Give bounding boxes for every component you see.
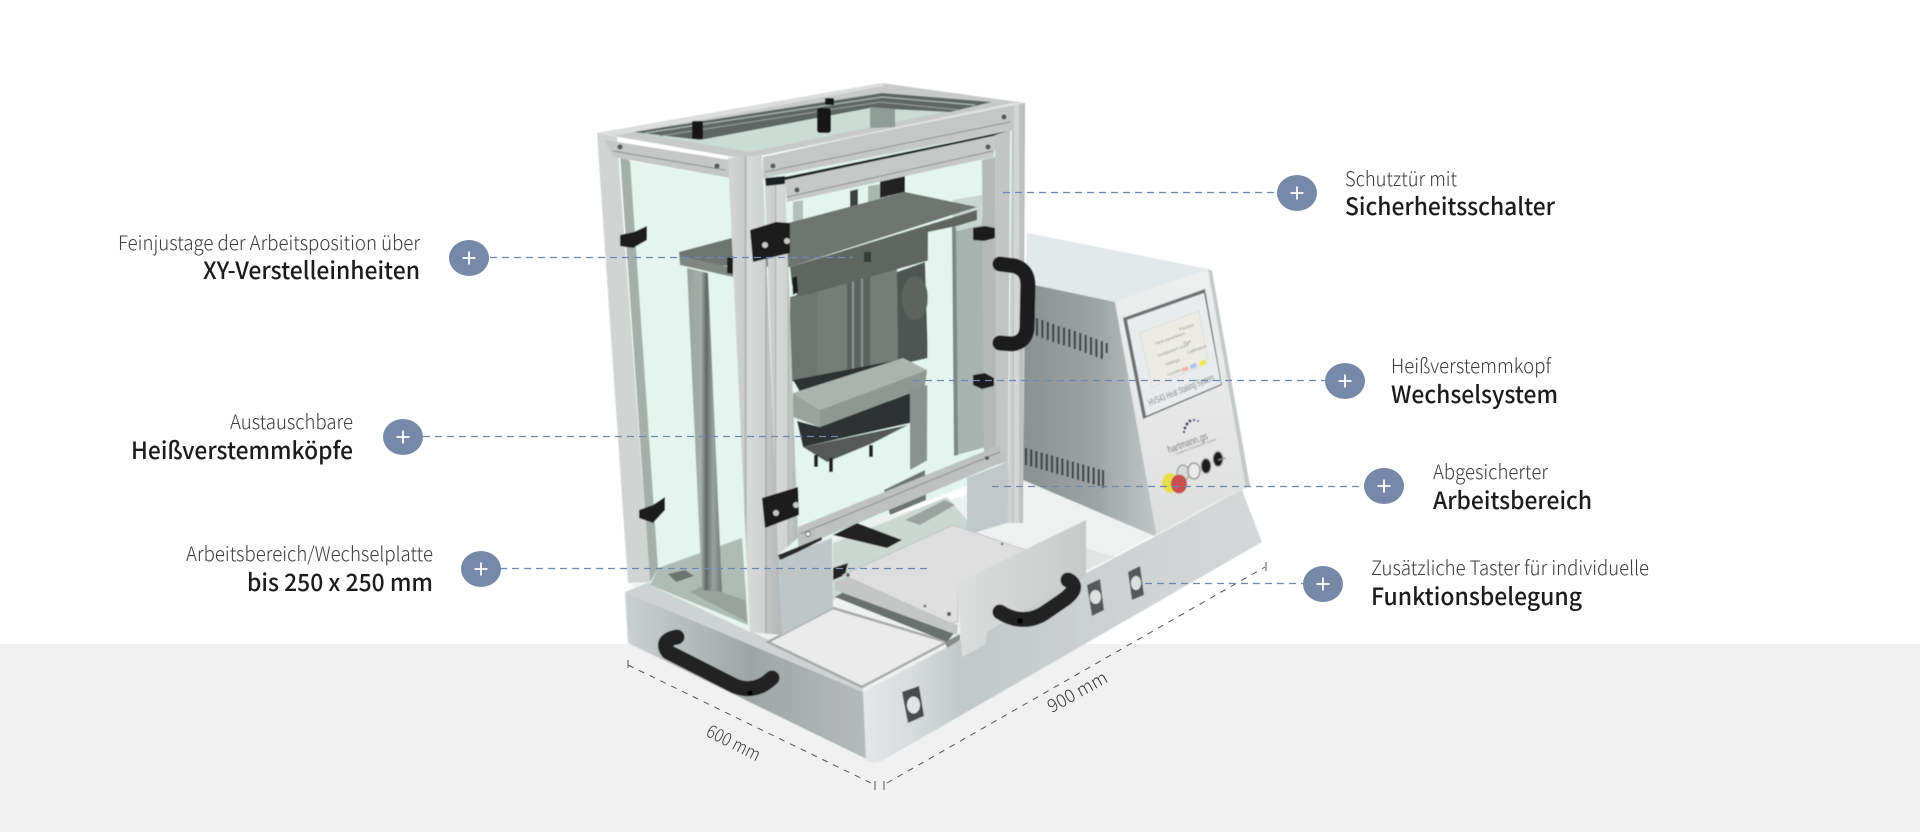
left base handle — [665, 637, 772, 689]
callout: Zusätzliche Taster Funktionsbelegung: Zusätzliche Taster für individuelle — [1371, 552, 1649, 581]
dimension: 900 mm: 900 mm — [1042, 664, 1112, 718]
callout: Austauschbare Heißverstemmköpfe: Austauschbare — [230, 406, 353, 435]
touch screen: HVS43 Heat Staking System — [1147, 372, 1216, 409]
touch screen: Calibration — [1187, 343, 1208, 355]
door left stile — [765, 180, 798, 555]
lower vents — [1026, 448, 1103, 488]
callout: Arbeitsbereich/Wechselplatte: bis 250 x 250 mm — [247, 563, 433, 598]
dimension: 900 mm — [884, 562, 1266, 790]
callout: Austauschbare Heißverstemmköpfe: Heißverstemmköpfe — [131, 431, 353, 466]
touch screen — [1123, 289, 1222, 419]
hinges and knobs — [620, 222, 995, 528]
callout: Austauschbare Heißverstemmköpfe — [131, 406, 842, 466]
callout: Feinjustage / XY-Verstelleinheiten: XY-Verstelleinheiten — [203, 251, 420, 286]
left glass and door opening — [630, 130, 1012, 632]
logo: hartmann.gs — [1166, 431, 1209, 456]
callout: Abgesicherter Arbeitsbereich: Abgesicherter — [1433, 456, 1549, 485]
base blocks and work plate — [768, 462, 1086, 687]
callout: Feinjustage / XY-Verstelleinheiten — [118, 227, 853, 286]
interior column — [687, 268, 722, 592]
callout: Feinjustage / XY-Verstelleinheiten: Feinjustage der Arbeitsposition über — [118, 227, 421, 256]
push button 3 — [1128, 566, 1144, 600]
upper plate — [679, 192, 977, 297]
callout: Schutztür mit Sicherheitsschalter: Schutztür mit — [1345, 163, 1457, 192]
door top rail — [785, 135, 998, 202]
right glass strip — [927, 227, 955, 462]
door right stile — [982, 157, 997, 452]
touch screen: Heat parameters — [1155, 331, 1186, 346]
callout: Abgesicherter Arbeitsbereich — [992, 456, 1592, 516]
background band — [0, 644, 1920, 832]
callout: Arbeitsbereich/Wechselplatte: Arbeitsbereich/Wechselplatte — [186, 538, 433, 567]
control buttons — [1162, 452, 1226, 494]
heat staking head — [797, 393, 910, 472]
right base handle — [1000, 580, 1074, 620]
callout: Abgesicherter Arbeitsbereich: Arbeitsbereich — [1433, 481, 1592, 516]
upper vents — [1037, 318, 1107, 359]
top frame — [597, 83, 1025, 159]
touch screen: Component count — [1157, 342, 1190, 358]
machine base — [625, 480, 1262, 763]
callout: Schutztür mit Sicherheitsschalter — [1003, 163, 1555, 222]
callout: Zusätzliche Taster Funktionsbelegung: Funktionsbelegung — [1371, 577, 1582, 612]
callout: Zusätzliche Taster Funktionsbelegung — [1145, 552, 1649, 612]
callout: Heißverstemmkopf Wechselsystem: Wechselsystem — [1391, 375, 1558, 410]
touch screen: Counter — [1167, 367, 1183, 377]
touch screen: Process — [1179, 322, 1195, 332]
callout: Heißverstemmkopf Wechselsystem: Heißverstemmkopf — [1391, 350, 1552, 379]
aluminium profiles — [597, 83, 1025, 635]
gray actuator — [790, 262, 928, 397]
front push button — [902, 686, 924, 723]
callout: Schutztür mit Sicherheitsschalter: Sicherheitsschalter — [1345, 187, 1555, 222]
light lift plate — [793, 358, 927, 427]
logo: Systeme Konzeption GmbH — [1175, 437, 1217, 456]
control cabinet — [1023, 233, 1250, 537]
callout: Heißverstemmkopf Wechselsystem — [913, 350, 1558, 410]
door handle — [1000, 264, 1028, 344]
machine illustration — [597, 83, 1262, 763]
touch screen: Settings — [1165, 357, 1181, 367]
callout: Arbeitsbereich/Wechselplatte — [186, 538, 928, 598]
screws — [618, 144, 622, 150]
touch screen: Part — [1183, 338, 1192, 346]
push button 2 — [1087, 579, 1104, 616]
dimension: 600 mm — [628, 660, 875, 790]
door bottom rail — [798, 445, 1008, 548]
dimension: 600 mm: 600 mm — [702, 717, 766, 767]
